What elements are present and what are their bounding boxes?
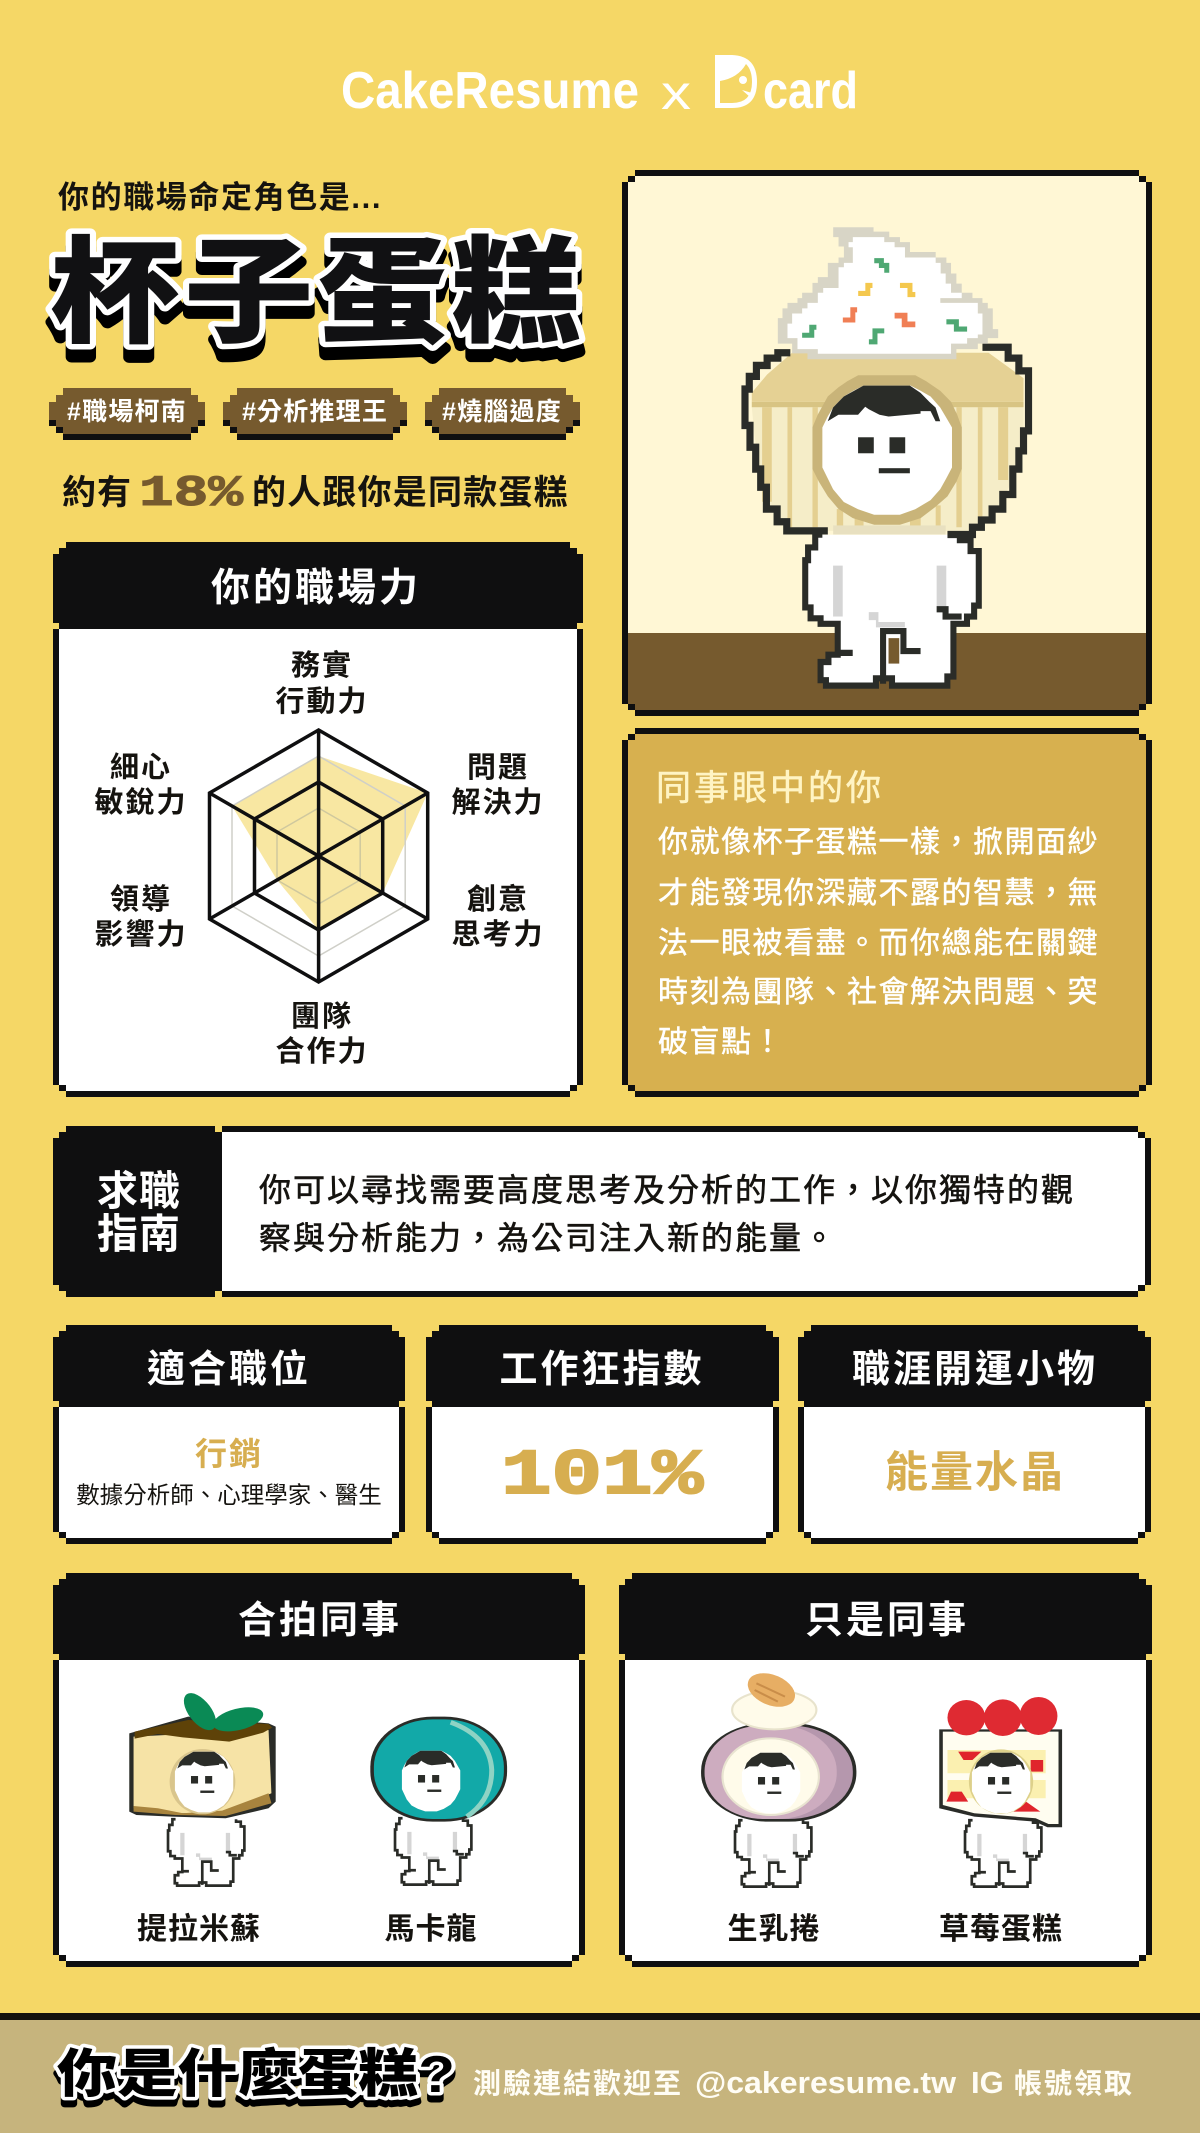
label: 指南 [97, 1211, 181, 1257]
tag: 職場柯南 [49, 388, 205, 440]
panel: 合拍同事 [53, 1573, 585, 1967]
panel: 工作狂指數: 工作狂指數 [499, 1349, 705, 1391]
description [658, 826, 1099, 1059]
panel: 適合職位: 行銷 [195, 1436, 263, 1472]
title: 杯子蛋糕: 杯子蛋糕 [50, 229, 585, 358]
panel: 只是同事: 只是同事 [805, 1600, 969, 1642]
label: 提拉米蘇 [137, 1913, 261, 1946]
radar labels: 領導 [110, 883, 172, 916]
heading: 同事眼中的你 [656, 769, 884, 808]
logo: CakeResume x Dcard [341, 55, 858, 120]
panel: 適合職位: 適合職位 [147, 1349, 311, 1391]
footer heading: 你是什麼蛋糕? [57, 2046, 455, 2104]
panel: 適合職位 [53, 1325, 405, 1544]
cupcake costume [745, 227, 1029, 664]
panel: 求職指南 [53, 1126, 1151, 1297]
subtitle: 你的職場命定角色是... [58, 180, 382, 215]
panel: 工作狂指數: 101% [501, 1441, 704, 1513]
footer text: @cakeresume.tw [695, 2065, 957, 2100]
label: 草莓蛋糕 [939, 1913, 1063, 1946]
title: 杯子蛋糕: 杯子蛋糕 [50, 242, 585, 371]
icon: Dcard D mark [715, 55, 757, 108]
description: 你就像杯子蛋糕一樣，掀開面紗 [658, 826, 1099, 859]
radar labels: 思考力 [451, 918, 545, 951]
footer text [473, 2065, 1134, 2100]
statistic line: 約有 [62, 474, 132, 512]
logo: CakeResume x Dcard: card [763, 62, 858, 120]
label [97, 1168, 181, 1257]
radar labels: 團隊 [291, 1000, 353, 1033]
panel: 職涯開運小物: 能量水晶 [885, 1449, 1065, 1497]
radar labels: 解決力 [451, 786, 545, 819]
panel: 工作狂指數 [426, 1325, 779, 1544]
frosting [778, 227, 998, 359]
radar labels: 創意 [467, 883, 529, 916]
title: 杯子蛋糕: 杯子蛋糕 [50, 229, 585, 358]
panel: 職涯開運小物 [798, 1325, 1151, 1544]
radar labels: 務實 [291, 649, 353, 682]
sprinkles [802, 261, 967, 342]
panel: 同事眼中的你 [622, 728, 1152, 1097]
description: 破盲點！ [658, 1026, 784, 1059]
panel: 合拍同事: 合拍同事 [238, 1600, 402, 1642]
radar labels: 細心 [110, 751, 172, 784]
description: 時刻為團隊、社會解決問題、突 [658, 976, 1099, 1009]
logo: CakeResume x Dcard: CakeResume [341, 62, 639, 120]
radar labels: 問題 [467, 752, 529, 784]
footer text: IG [971, 2065, 1004, 2100]
tag: 分析推理王 [223, 388, 407, 440]
radar labels: 影響力 [94, 918, 188, 951]
logo: CakeResume x Dcard: x [661, 67, 691, 120]
radar chart [210, 730, 428, 982]
guidance text [259, 1172, 1075, 1256]
tag: 分析推理王: #分析推理王 [242, 398, 388, 426]
statistic line [62, 469, 569, 519]
character body [805, 535, 979, 686]
radar labels: 合作力 [275, 1035, 369, 1068]
character: 草莓蛋糕 [939, 1697, 1062, 1887]
character head [822, 386, 952, 515]
label: 求職 [97, 1168, 181, 1214]
footer heading: 你是什麼蛋糕? [57, 2053, 455, 2111]
statistic line: 的人跟你是同款蛋糕 [252, 474, 569, 512]
footer [0, 2013, 1200, 2133]
label: 生乳捲 [728, 1913, 820, 1946]
footer heading: 你是什麼蛋糕? [57, 2046, 455, 2104]
radar labels: 行動力 [275, 685, 369, 718]
description: 法一眼被看盡。而你總能在關鍵 [658, 927, 1099, 960]
radar labels [94, 649, 545, 1068]
footer text: 帳號領取 [1014, 2068, 1134, 2099]
panel: 你的職場力 [53, 542, 583, 1097]
radar labels: 敏銳力 [94, 786, 188, 819]
character: 馬卡龍 [370, 1717, 507, 1885]
guidance text: 察與分析能力，為公司注入新的能量。 [259, 1220, 837, 1256]
label: 馬卡龍 [384, 1913, 478, 1946]
character: 提拉米蘇 [129, 1688, 276, 1886]
panel: 只是同事 [619, 1573, 1152, 1967]
panel: cupcake character [622, 170, 1152, 716]
guidance text: 你可以尋找需要高度思考及分析的工作，以你獨特的觀 [259, 1172, 1075, 1208]
tag: 職場柯南: #職場柯南 [67, 398, 187, 426]
footer text: 測驗連結歡迎至 [473, 2067, 683, 2099]
tag: 燒腦過度 [425, 388, 580, 440]
tag: 燒腦過度: #燒腦過度 [442, 398, 562, 426]
panel: 適合職位: 數據分析師、心理學家、醫生 [76, 1482, 382, 1508]
heading: 你的職場力 [211, 567, 421, 610]
statistic line: 18% [139, 469, 244, 519]
description: 才能發現你深藏不露的智慧，無 [658, 877, 1099, 910]
character: 生乳捲 [701, 1667, 856, 1887]
panel: 職涯開運小物: 職涯開運小物 [852, 1349, 1098, 1391]
